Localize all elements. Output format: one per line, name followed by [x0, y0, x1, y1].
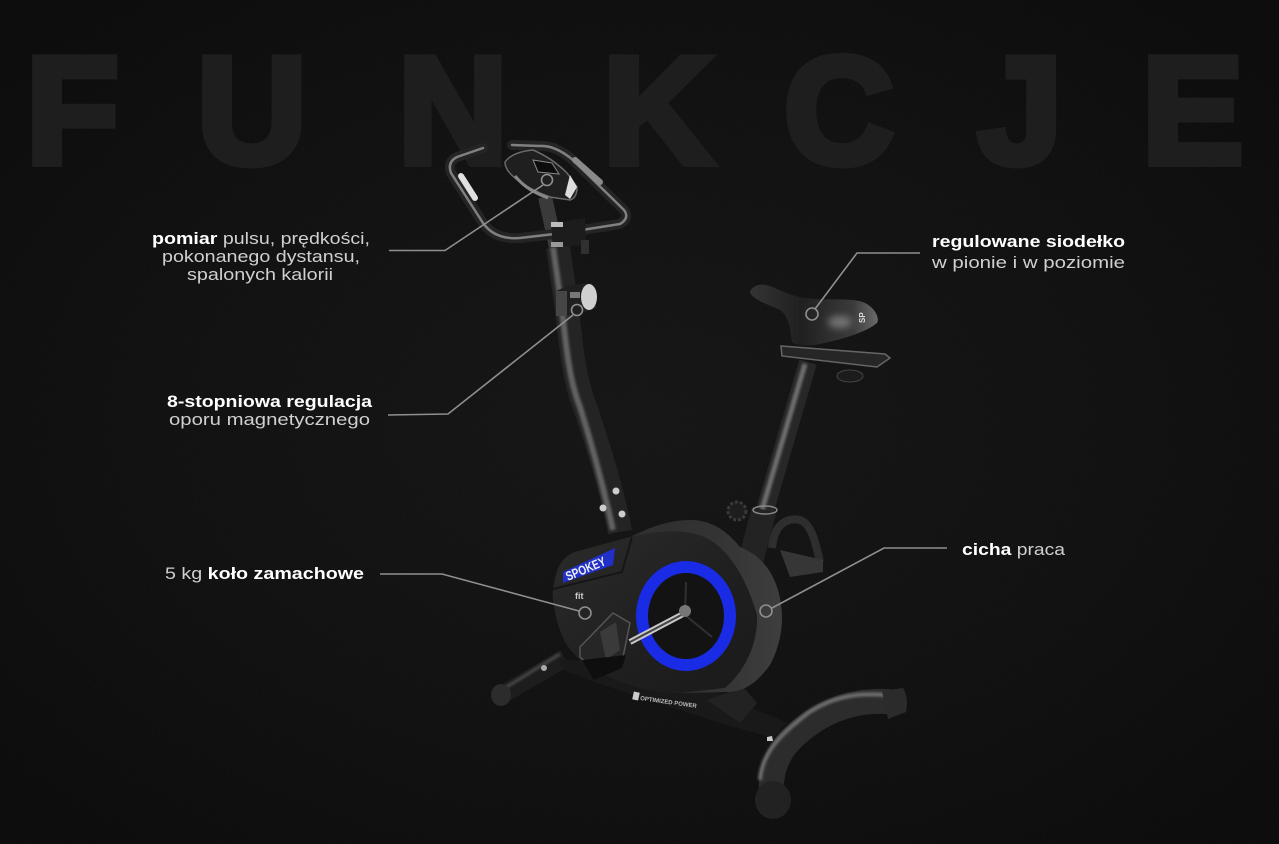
callout line: resistance [388, 304, 582, 415]
brand badge: SPOKEY [563, 553, 608, 584]
handlebar [450, 145, 626, 238]
label: pulse measurement: pomiar pulsu, prędkości, [152, 229, 370, 248]
rear stabiliser [491, 654, 565, 706]
label: resistance [167, 392, 373, 429]
resistance knob [556, 283, 597, 316]
title: FUNKCJE: FUNKCJE [26, 26, 1243, 196]
label: saddle: w pionie i w poziomie [931, 253, 1125, 272]
blue ring [642, 567, 730, 665]
label: pulse measurement [152, 229, 370, 284]
brand badge [563, 548, 615, 601]
label: pulse measurement: pokonanego dystansu, [162, 247, 360, 266]
label: pulse measurement: spalonych kalorii [187, 265, 333, 284]
upright column [545, 197, 626, 532]
saddle: SP [858, 312, 867, 323]
crank and pedal [580, 605, 691, 680]
saddle [750, 285, 890, 382]
seat post [728, 362, 808, 560]
base beam [558, 660, 787, 741]
callout line: saddle [806, 253, 920, 320]
label: resistance: 8-stopniowa regulacja [167, 392, 373, 411]
callout line: pulse measurement [389, 174, 552, 250]
brand badge: fit [575, 591, 584, 601]
front stabiliser [755, 688, 907, 819]
callout line: flywheel [380, 574, 591, 619]
label: flywheel: 5 kg koło zamachowe [165, 564, 364, 583]
right pedal [772, 519, 823, 577]
label: resistance: oporu magnetycznego [169, 410, 370, 429]
base beam: OPTIMIZED POWER [640, 696, 698, 710]
label: quiet operation: cicha praca [962, 540, 1066, 559]
label: saddle [931, 232, 1125, 272]
handlebar clamp [551, 218, 589, 254]
console [505, 150, 577, 200]
flywheel housing [553, 520, 782, 693]
label: saddle: regulowane siodełko [932, 232, 1125, 251]
callout line: quiet operation [760, 548, 947, 617]
exercise bike [450, 145, 907, 819]
